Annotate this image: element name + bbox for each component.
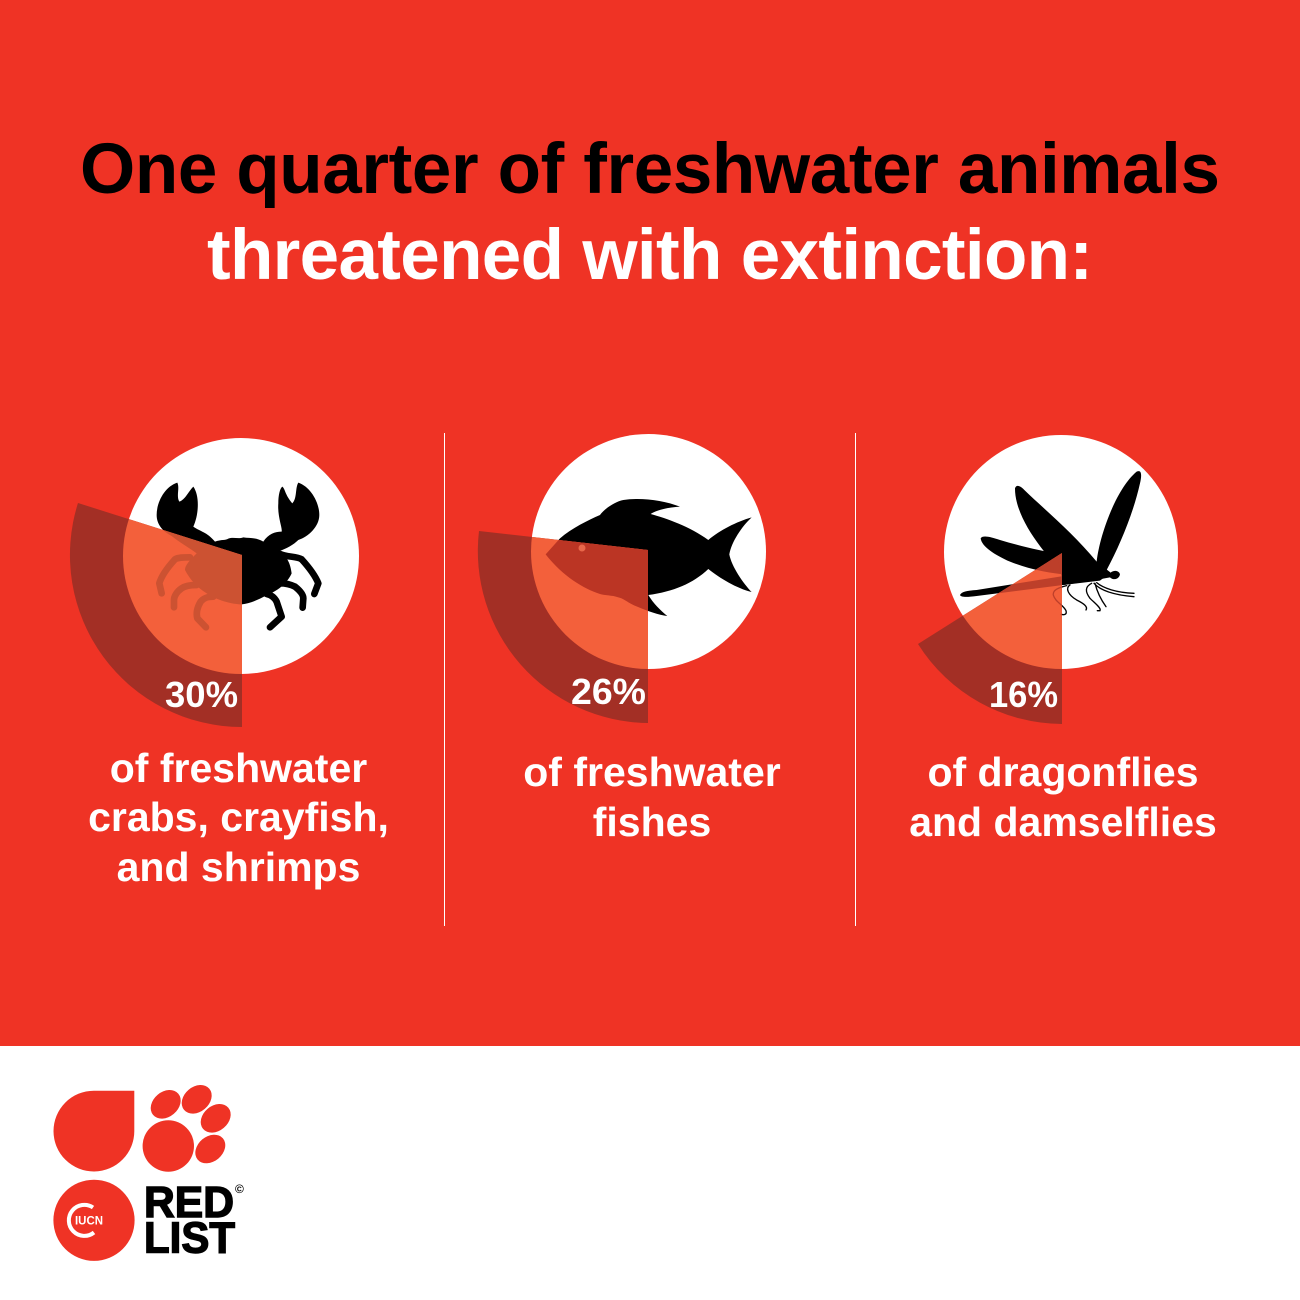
percentage: 30%: 30% (165, 674, 238, 715)
label: crabs: crabs, crayfish, (88, 794, 389, 840)
label: fishes: of freshwater (523, 749, 781, 795)
label: fishes (523, 749, 781, 845)
panel: dragonflies and damselflies (909, 435, 1217, 845)
label: crabs (88, 745, 389, 890)
icon: paw print (143, 1079, 236, 1172)
label: dragonflies (909, 749, 1217, 845)
percentage: 16%: 16% (989, 674, 1058, 715)
title line 2: threatened with extinction: (207, 216, 1093, 295)
label: crabs: and shrimps (117, 844, 360, 890)
icon: IUCN badge: IUCN (75, 1216, 103, 1228)
wedge: 26 percent (478, 531, 648, 723)
icon: IUCN badge (53, 1180, 135, 1261)
wedge: 30 percent (70, 503, 242, 727)
white circle: crab (123, 438, 359, 674)
wedge overlap on circle (123, 519, 242, 674)
wedge: 16 percent (918, 553, 1062, 724)
label: fishes: fishes (593, 799, 711, 845)
label: crabs: of freshwater (110, 745, 367, 791)
wedge overlap on circle (963, 553, 1062, 669)
panel: crabs, crayfish and shrimps (70, 438, 389, 890)
title (80, 130, 1220, 295)
percentage: 26%: 26% (571, 671, 646, 712)
icon: drop (54, 1091, 134, 1172)
white circle: dragonfly (944, 435, 1178, 669)
label: dragonflies: of dragonflies (927, 749, 1199, 795)
white circle: fish (531, 434, 766, 669)
copyright mark: © (235, 1182, 244, 1196)
wordmark: RED: RED (144, 1179, 234, 1227)
panel: freshwater fishes (478, 434, 781, 845)
icon: dragonfly (960, 471, 1141, 615)
logo: IUCN Red List (53, 1079, 244, 1262)
title line 1: One quarter of freshwater animals (80, 130, 1220, 209)
icon: fish (546, 499, 752, 616)
icon: crab (157, 483, 319, 627)
label: dragonflies: and damselflies (909, 799, 1217, 845)
wedge overlap on circle (531, 536, 648, 669)
wordmark: LIST: LIST (144, 1214, 235, 1262)
